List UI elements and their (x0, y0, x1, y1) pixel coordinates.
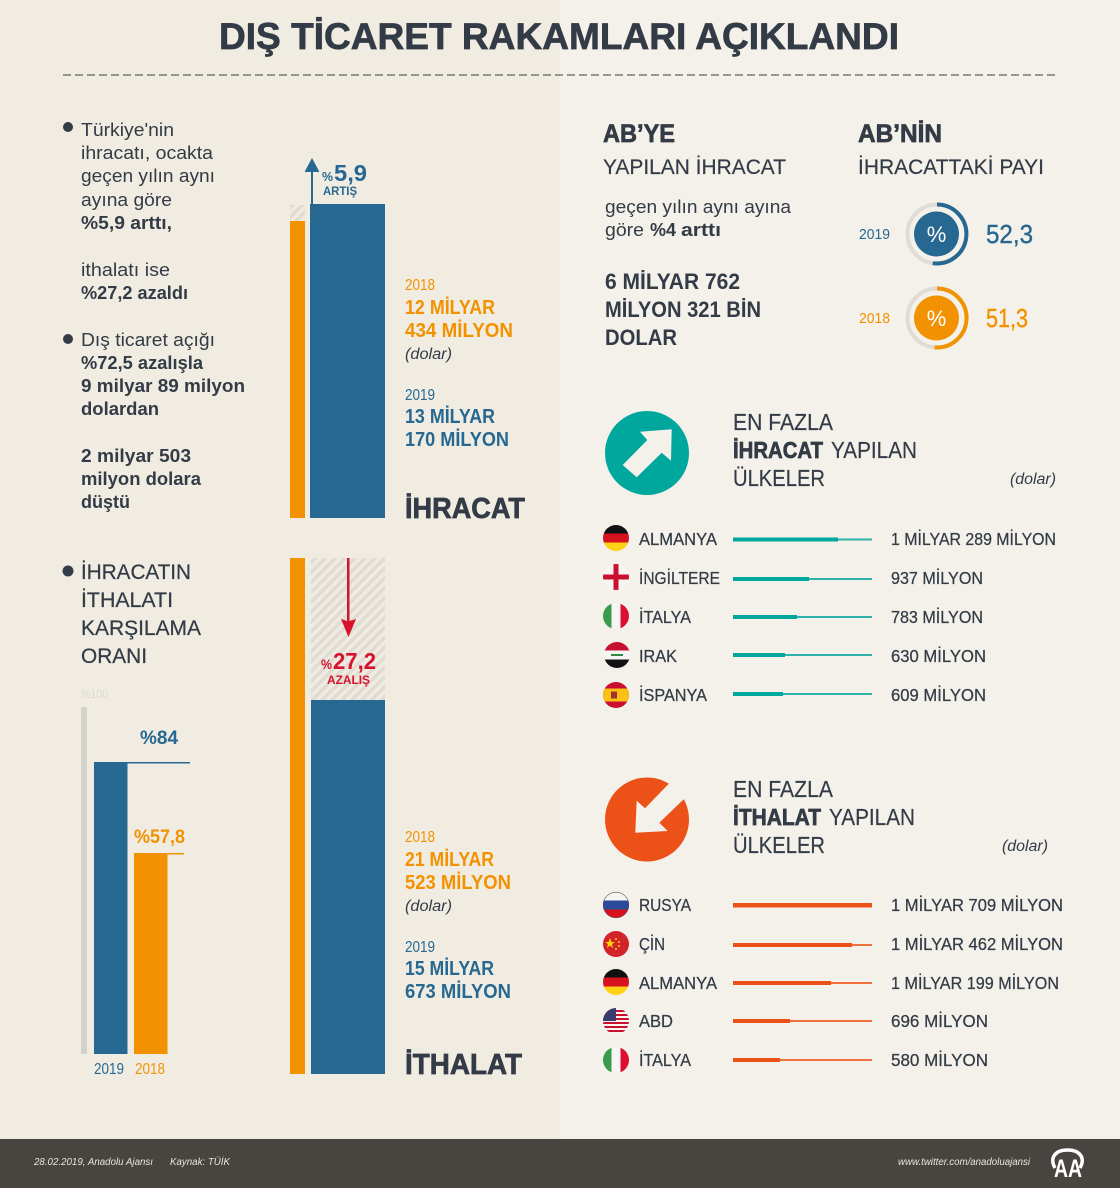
heading: top import countries: İTHALAT (733, 804, 821, 830)
text block: summary bullets: %72,5 azalışla (81, 353, 204, 373)
panel: exports to EU: göre (605, 220, 644, 240)
donut: 2018: 2018 (859, 310, 890, 327)
panel: exports to EU: YAPILAN İHRACAT (603, 155, 786, 179)
row: ABD: ABD (639, 1011, 673, 1031)
text block: summary bullets: düştü (81, 492, 130, 512)
panel: exports to EU: MİLYON 321 BİN (605, 297, 761, 322)
heading: top export countries: (dolar) (1010, 471, 1056, 488)
row: İtalya: 783 MİLYON (891, 607, 983, 627)
chart: export bars (290, 158, 385, 518)
row: İspanya: İSPANYA (639, 685, 707, 705)
row: Irak: 630 MİLYON (891, 646, 986, 666)
values: import: 523 MİLYON (405, 871, 511, 894)
values: export: 434 MİLYON (405, 319, 513, 342)
panel: exports to EU (603, 120, 792, 350)
row: İtalya (603, 603, 983, 629)
label: import change: 27,2 (333, 648, 376, 674)
row: Rusya: RUSYA (639, 895, 691, 915)
heading: top export countries: YAPILAN (831, 437, 917, 463)
text block: summary bullets: %5,9 arttı, (81, 213, 172, 233)
text block: summary bullets: Türkiye'nin (81, 120, 174, 140)
text block: summary bullets: ayına göre (81, 190, 172, 210)
row: Irak: IRAK (639, 646, 677, 666)
values: export: 2019 (405, 387, 435, 404)
chart: coverage ratio: %100 (81, 689, 108, 701)
heading: top import countries: ÜLKELER (733, 832, 825, 858)
text block: summary bullets: %27,2 azaldı (81, 283, 188, 303)
heading: import: İTHALAT (405, 1049, 522, 1081)
row: İngiltere: 937 MİLYON (891, 568, 983, 588)
values: export (405, 277, 513, 451)
row: İtalya: İTALYA (639, 607, 691, 627)
text block: summary bullets: ihracatı, ocakta (81, 143, 214, 163)
row: Almanya: 1 MİLYAR 289 MİLYON (891, 529, 1056, 549)
row: Almanya (603, 525, 1056, 552)
values: export: 12 MİLYAR (405, 296, 495, 319)
donut: 2018 (859, 288, 1028, 348)
text block: summary bullets: milyon dolara (81, 469, 202, 489)
arrow: export increase (304, 158, 320, 204)
panel: exports to EU: %4 (650, 220, 676, 240)
values: export: 13 MİLYAR (405, 405, 495, 428)
footer (0, 1139, 1120, 1188)
panel: exports to EU: AB’YE (603, 120, 675, 148)
heading: top import countries: EN FAZLA (733, 776, 834, 802)
row: ABD: 696 MİLYON (891, 1011, 988, 1031)
row: Çin: 1 MİLYAR 462 MİLYON (891, 934, 1063, 954)
panel: EU share in exports: AB’NİN (858, 120, 942, 148)
heading: export: İHRACAT (405, 493, 525, 525)
icon: import arrow (605, 772, 700, 862)
row: İtalya (603, 1047, 988, 1073)
label: import change: AZALIŞ (327, 673, 370, 687)
row: Almanya (603, 969, 1059, 996)
heading: coverage ratio (62, 560, 202, 668)
chart: import bars (290, 558, 385, 1074)
text block: summary bullets: 2 milyar 503 (81, 446, 191, 466)
text block: summary bullets: geçen yılın aynı (81, 166, 215, 186)
text block: summary bullets: ithalatı ise (81, 260, 170, 280)
donut: 2018: % (927, 306, 946, 331)
text block: summary bullets: 9 milyar 89 milyon (81, 376, 245, 396)
row: Çin (603, 931, 1063, 957)
footer: Kaynak: TÜİK (170, 1156, 231, 1168)
donut: 2019: 2019 (859, 226, 890, 243)
row: Almanya: ALMANYA (639, 973, 717, 993)
text block: summary bullets: Dış ticaret açığı (81, 330, 215, 350)
row: ABD (603, 1008, 988, 1034)
donut: 2018: 51,3 (986, 303, 1028, 333)
arrow: import decrease (341, 558, 356, 637)
label: import change (321, 648, 376, 687)
panel: EU share in exports: İHRACATTAKİ PAYI (858, 155, 1044, 179)
list: top import countries (603, 892, 1063, 1073)
footer: www.twitter.com/anadoluajansi (898, 1157, 1031, 1168)
panel: EU share in exports (858, 120, 1044, 348)
values: import: 2018 (405, 829, 435, 846)
row: İspanya: 609 MİLYON (891, 685, 986, 705)
values: export: 170 MİLYON (405, 428, 509, 451)
values: import: (dolar) (405, 898, 452, 915)
panel: exports to EU: arttı (681, 220, 721, 240)
logo: Anadolu Ajansı (1053, 1150, 1082, 1183)
row: Almanya: ALMANYA (639, 529, 717, 549)
values: import: 2019 (405, 939, 435, 956)
chart: coverage ratio: 2018 (135, 1061, 165, 1078)
icon: export arrow (605, 411, 689, 495)
footer: 28.02.2019, Anadolu Ajansı (33, 1157, 153, 1168)
donut: 2019: % (927, 222, 946, 247)
row: İspanya (603, 682, 986, 708)
label: export change: ARTIŞ (323, 184, 357, 198)
values: export: 2018 (405, 277, 435, 294)
values: import: 21 MİLYAR (405, 848, 494, 871)
label: export change: 5,9 (334, 160, 367, 186)
heading: top export countries (733, 409, 1056, 491)
chart: coverage ratio: %57,8 (134, 827, 185, 848)
values: import: 673 MİLYON (405, 980, 511, 1003)
row: İtalya: İTALYA (639, 1050, 691, 1070)
chart: coverage ratio: %84 (140, 728, 178, 749)
heading: coverage ratio: ORANI (81, 644, 147, 668)
text block: summary bullets (63, 120, 245, 512)
label: export change (322, 160, 367, 198)
row: Irak (604, 642, 986, 668)
donut: 2019: 52,3 (986, 219, 1033, 249)
heading: coverage ratio: İHRACATIN (81, 560, 191, 584)
chart: coverage ratio (81, 689, 190, 1078)
row: İngiltere: İNGİLTERE (639, 568, 720, 588)
values: import: 15 MİLYAR (405, 957, 494, 980)
heading: top export countries: EN FAZLA (733, 409, 834, 435)
row: Çin: ÇİN (639, 934, 665, 954)
text block: summary bullets: dolardan (81, 399, 159, 419)
panel: exports to EU: 6 MİLYAR 762 (605, 269, 740, 294)
heading: top import countries (733, 776, 1048, 858)
heading: top export countries: İHRACAT (733, 437, 823, 463)
panel: exports to EU: geçen yılın aynı ayına (605, 197, 792, 217)
row: İngiltere (603, 564, 983, 590)
heading: top import countries: YAPILAN (829, 804, 915, 830)
heading: coverage ratio: İTHALATI (81, 588, 173, 612)
donut: 2019 (859, 204, 1033, 264)
logo: Anadolu Ajansı: AA (1054, 1155, 1082, 1183)
label: export change: % (322, 169, 333, 184)
list: top export countries (603, 525, 1056, 708)
values: import (405, 829, 511, 1003)
chart: coverage ratio: 2019 (94, 1061, 124, 1078)
panel: exports to EU: DOLAR (605, 325, 677, 350)
row: Rusya (603, 892, 1063, 918)
row: İtalya: 580 MİLYON (891, 1050, 988, 1070)
heading: top export countries: ÜLKELER (733, 465, 825, 491)
row: Rusya: 1 MİLYAR 709 MİLYON (891, 895, 1063, 915)
heading: top import countries: (dolar) (1002, 838, 1048, 855)
heading: coverage ratio: KARŞILAMA (81, 616, 202, 640)
label: import change: % (321, 656, 332, 672)
row: Almanya: 1 MİLYAR 199 MİLYON (891, 973, 1059, 993)
values: export: (dolar) (405, 346, 452, 363)
title: DIŞ TİCARET RAKAMLARI AÇIKLANDI (219, 16, 899, 57)
